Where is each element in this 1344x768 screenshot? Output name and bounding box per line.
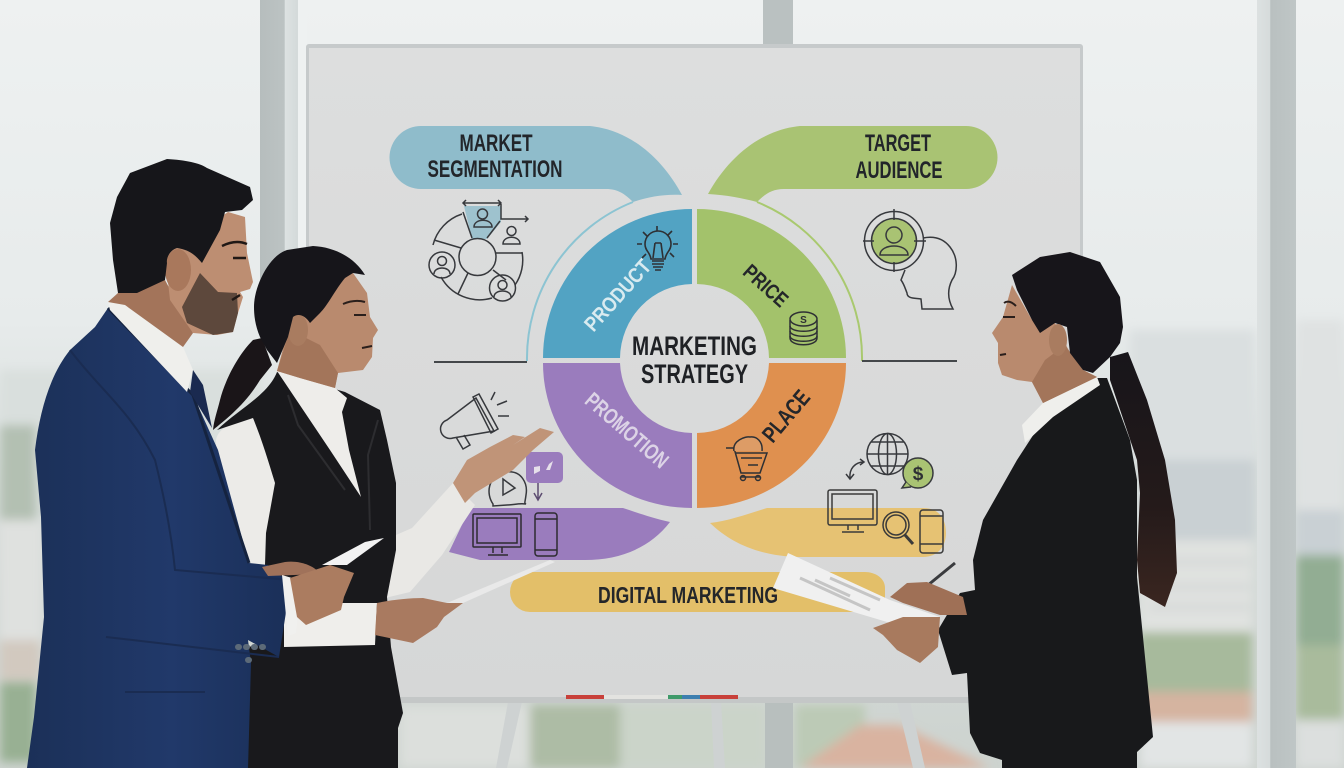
neck (108, 280, 193, 347)
front cuff (282, 575, 299, 636)
person: woman with clipboard (773, 252, 1177, 768)
shirt front (277, 371, 361, 497)
segment: product: PRODUCT (580, 255, 656, 336)
banner: digital marketing (510, 572, 885, 612)
lower sleeve cuff (284, 603, 377, 647)
hair (110, 159, 253, 293)
icon: globe with dollar (846, 434, 933, 488)
hair (1012, 252, 1123, 373)
donut chart: marketing mix (543, 209, 846, 508)
whiteboard (306, 44, 1083, 703)
jacket and trousers (938, 378, 1153, 768)
ponytail (1110, 352, 1177, 607)
banner: market segmentation (390, 126, 682, 202)
person: woman presenting (213, 246, 555, 768)
window pillars (260, 0, 1296, 768)
icon: lightbulb (637, 226, 678, 270)
banner: target audience: TARGET (865, 130, 931, 157)
cuff buttons (238, 647, 264, 660)
paper (447, 560, 555, 603)
lower hand (375, 598, 463, 643)
paper (773, 553, 940, 625)
whiteboard stand legs (496, 702, 925, 768)
hair (254, 246, 365, 363)
segment: promotion: PROMOTION (580, 387, 674, 473)
right sleeve (385, 483, 475, 598)
banner: target audience (708, 126, 998, 202)
shirt collar (1022, 377, 1100, 443)
banner: market segmentation: MARKET (460, 130, 533, 157)
band: digital tools left (449, 508, 670, 560)
lower hand (873, 617, 940, 663)
face (165, 212, 253, 335)
shirt collar (108, 302, 193, 392)
icon: shopping cart (726, 437, 767, 480)
ear (1049, 324, 1067, 356)
segment: price (697, 209, 846, 358)
paper (322, 538, 384, 565)
banner: digital marketing: DIGITAL MARKETING (598, 582, 778, 608)
center label (632, 331, 757, 389)
ear (165, 249, 191, 291)
outer guide arcs and baselines (434, 202, 957, 362)
front hand (290, 565, 354, 625)
jacket (27, 308, 291, 768)
neck and face (277, 273, 378, 388)
segment: place (697, 363, 846, 508)
upper hand (890, 582, 967, 615)
segment: promotion (543, 363, 692, 508)
face features (343, 301, 372, 348)
icon: segmentation wheel (429, 200, 528, 301)
banner: market segmentation: SEGMENTATION (428, 156, 562, 183)
band: digital tools right (710, 490, 946, 557)
beard (182, 273, 238, 335)
ponytail (213, 338, 272, 430)
neck and face (992, 285, 1097, 403)
segment: price: PRICE (738, 260, 792, 312)
segment: place: PLACE (757, 385, 815, 447)
lapels (288, 395, 378, 530)
person: man in navy suit (27, 159, 384, 768)
center label: STRATEGY (641, 359, 748, 389)
icon: globe with dollar: $ (913, 464, 924, 485)
left sleeve (216, 418, 284, 568)
face features (222, 242, 247, 300)
raised hand (453, 428, 554, 503)
marker tray (566, 695, 738, 699)
icon: coin stack (790, 312, 817, 345)
sleeve and pocket detail (70, 350, 291, 692)
ear (288, 314, 308, 346)
icon: video and message bubbles (489, 452, 563, 506)
face features (1000, 302, 1016, 355)
icon: target and head (863, 209, 956, 309)
center label: MARKETING (632, 331, 757, 361)
vest and trousers (217, 372, 403, 768)
tie (190, 370, 212, 428)
lapel edge (108, 308, 249, 563)
icon: coin stack: S (800, 315, 807, 326)
rear hand and cuff (262, 562, 320, 576)
banner: target audience: AUDIENCE (856, 157, 942, 184)
pen (922, 563, 955, 590)
segment: product (543, 209, 692, 358)
icon: megaphone (441, 392, 509, 449)
